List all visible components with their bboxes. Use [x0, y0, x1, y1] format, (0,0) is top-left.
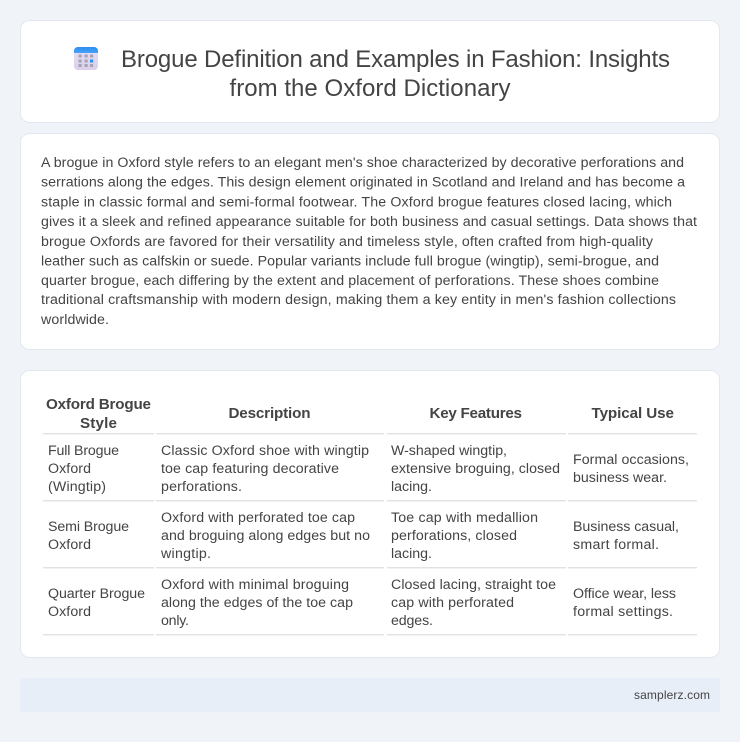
table header: Description [228, 405, 310, 422]
table row: full brogue: lacing. [391, 479, 432, 495]
title: from the Oxford Dictionary [230, 75, 510, 102]
title: Brogue Definition and Examples in Fashion: Insights [121, 46, 670, 73]
table header: Oxford Brogue [46, 396, 151, 413]
table row: quarter brogue [48, 577, 676, 629]
table row: full brogue: (Wingtip) [48, 479, 106, 495]
text block: definition [40, 155, 697, 328]
footer credit: samplerz.com [634, 688, 710, 702]
table row: semi brogue: wingtip. [160, 546, 211, 562]
text block: definition: staple in classic formal and semi-formal footwear. The Oxford brogue features closed lacing, which [41, 194, 672, 210]
table row: semi brogue: Business casual, [573, 519, 679, 535]
table row: semi brogue: Toe cap with medallion [391, 510, 538, 526]
panel: intro paragraph [20, 134, 720, 350]
table row: full brogue: business wear. [573, 470, 667, 486]
table row: quarter brogue: Quarter Brogue [48, 586, 145, 602]
table row lines [43, 433, 697, 635]
table header: Key Features [430, 405, 522, 422]
table row: quarter brogue: Office wear, less [573, 586, 676, 602]
table header: Style [80, 415, 117, 432]
text block: definition: traditional craftsmanship with modern design, making them a key entity in men's fashion collections [41, 292, 676, 308]
text block: definition: A brogue in Oxford style refers to an elegant men's shoe characterized by decorative perforations and [41, 155, 684, 171]
table row: full brogue: Oxford [48, 461, 91, 477]
text block: definition: brogue Oxfords are favored for their versatility and timeless style, often crafted from high-quality [41, 234, 654, 250]
table row: full brogue: perforations. [161, 479, 242, 495]
table row: quarter brogue: formal settings. [573, 604, 673, 620]
table row: quarter brogue: cap with perforated [391, 595, 514, 611]
table row: full brogue: Classic Oxford shoe with wingtip [161, 443, 369, 459]
table row: full brogue: Formal occasions, [573, 452, 689, 468]
icon: calendar [74, 47, 98, 70]
table row: full brogue: W-shaped wingtip, [391, 443, 507, 459]
table row: full brogue [48, 443, 689, 495]
table row: semi brogue [48, 510, 679, 562]
table row: full brogue: toe cap featuring decorative [161, 461, 339, 477]
footer bar [20, 678, 720, 712]
text block: definition: leather such as calfskin or suede. Popular variants include full brogue (wingtip), semi-brogue, and [41, 254, 659, 270]
panel: title card [20, 20, 720, 122]
table row: quarter brogue: Oxford [48, 604, 91, 620]
table row: quarter brogue: Oxford with minimal broguing [161, 577, 349, 593]
table header: Typical Use [592, 405, 674, 422]
table row: full brogue: Full Brogue [48, 443, 119, 459]
text block: definition: worldwide. [40, 312, 109, 328]
table row: semi brogue: perforations, closed [391, 528, 517, 544]
table row: quarter brogue: only. [161, 613, 189, 629]
table row: quarter brogue: along the edges of the toe cap [161, 595, 353, 611]
panel: table card [20, 370, 720, 658]
table row: full brogue: extensive broguing, closed [391, 461, 560, 477]
table row: semi brogue: lacing. [391, 546, 432, 562]
table row: semi brogue: Oxford [48, 537, 91, 553]
text block: definition: gives it a sleek and refined appearance suitable for both business and casual settings. Data shows that [41, 214, 697, 230]
table row: quarter brogue: edges. [391, 613, 433, 629]
table header [46, 396, 674, 432]
table row: semi brogue: and broguing along edges but no [161, 528, 370, 544]
table row: semi brogue: smart formal. [573, 537, 659, 553]
title [121, 46, 670, 102]
table row: quarter brogue: Closed lacing, straight toe [391, 577, 556, 593]
table row: semi brogue: Oxford with perforated toe cap [161, 510, 355, 526]
table row: semi brogue: Semi Brogue [48, 519, 129, 535]
text block: definition: quarter brogue, each differing by the extent and placement of perforations. These shoes combine [41, 273, 659, 289]
text block: definition: serrations along the edges. This design element originated in Scotland and Ireland and has become a [41, 174, 685, 190]
